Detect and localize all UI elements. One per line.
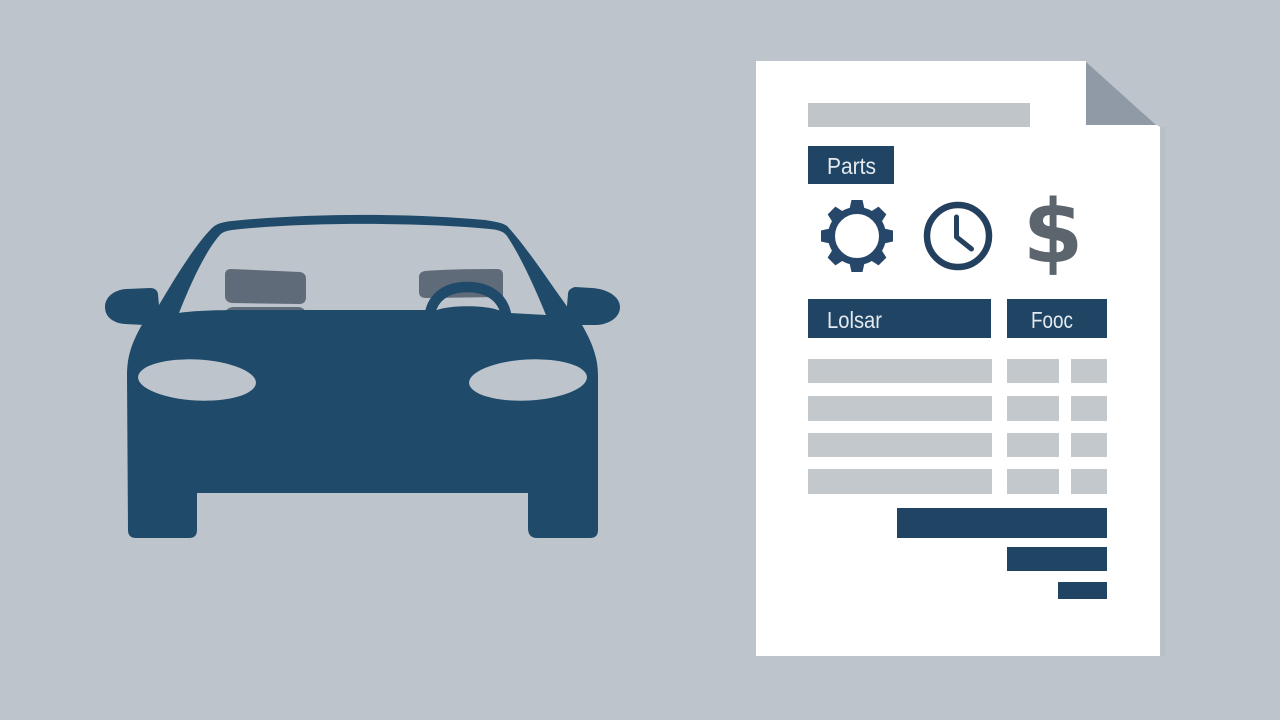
- car body: [127, 306, 598, 538]
- label: Parts: [808, 146, 894, 184]
- car mirror right: [555, 287, 620, 325]
- icon: gear: [821, 200, 893, 272]
- table header: Lolsar: Lolsar: [827, 307, 882, 333]
- car seat left base: [226, 307, 305, 311]
- car seat right: [419, 269, 503, 298]
- table header: Fooc: Fooc: [1031, 307, 1073, 333]
- document shadow: [1160, 127, 1166, 656]
- icon: dollar sign: $: [1023, 181, 1083, 283]
- icon: car front view: [105, 215, 620, 538]
- panel: invoice document: [756, 61, 1166, 656]
- table header: Fooc: [1007, 299, 1107, 338]
- car windshield frame: [146, 215, 578, 326]
- document sheet: [756, 61, 1160, 656]
- totals bars: [897, 508, 1107, 599]
- car mirror left: [105, 288, 172, 325]
- document title placeholder: [808, 103, 1030, 127]
- table rows: [808, 359, 1107, 494]
- icon: clock: [927, 205, 989, 267]
- document folded corner: [1086, 62, 1156, 125]
- car seat left: [225, 269, 306, 304]
- car steering wheel: [430, 287, 506, 314]
- car headlight left: [137, 356, 257, 404]
- label: Parts: Parts: [827, 153, 876, 179]
- car headlight right: [468, 356, 588, 404]
- table header: Lolsar: [808, 299, 991, 338]
